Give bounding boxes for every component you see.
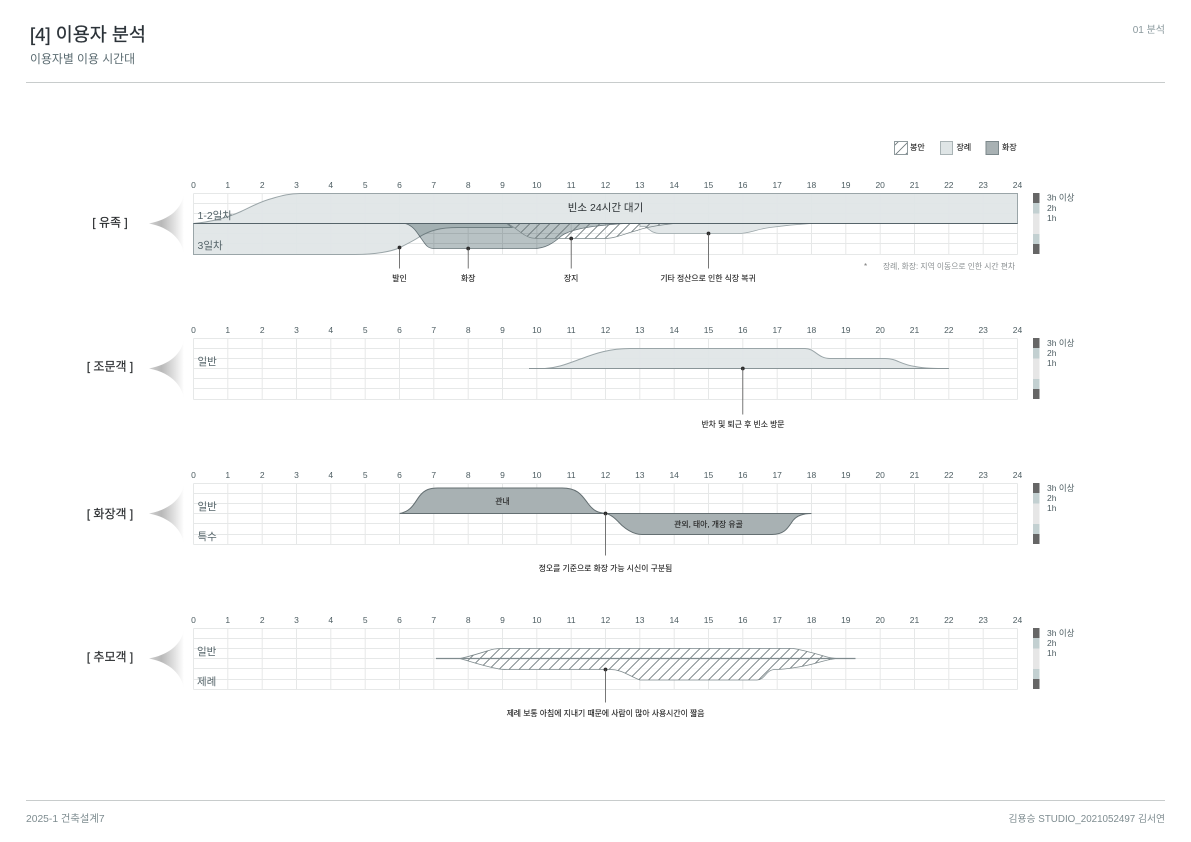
hour axis: 2 <box>260 180 265 190</box>
hour axis: 19 <box>841 180 851 190</box>
hour axis: 12 <box>601 325 610 335</box>
hour axis: 1 <box>225 470 230 480</box>
hour axis: 24 <box>1013 615 1022 625</box>
hour axis: 24 <box>1013 180 1022 190</box>
hour axis: 2 <box>260 470 265 480</box>
row label: 3일차: 3일차 <box>198 239 223 252</box>
hour axis: 13 <box>635 180 645 190</box>
hour axis: 9 <box>500 180 505 190</box>
hour axis: 7 <box>431 180 436 190</box>
hour axis: 11 <box>567 180 576 190</box>
hour axis: 6 <box>397 325 402 335</box>
callout: 장지: 장지 <box>564 273 578 283</box>
title: [4] 이용자 분석 <box>30 24 146 45</box>
heading: 유족: [ 유족 ] <box>92 216 128 230</box>
hour axis: 8 <box>466 325 471 335</box>
heading: 추모객: [ 추모객 ] <box>87 650 133 664</box>
hour axis: 23 <box>978 325 988 335</box>
hour axis: 20 <box>875 180 885 190</box>
hour axis: 11 <box>567 470 576 480</box>
hour axis: 19 <box>841 470 851 480</box>
scale bar: 2h <box>1047 493 1057 503</box>
hour axis: 12 <box>601 180 610 190</box>
hour axis: 15 <box>704 180 713 190</box>
hour axis: 15 <box>704 615 713 625</box>
hour axis: 16 <box>738 615 748 625</box>
row label: 1-2일차: 1-2일차 <box>198 209 232 222</box>
hour axis: 4 <box>328 615 333 625</box>
hour axis: 16 <box>738 325 748 335</box>
area: 화장 <box>405 224 625 248</box>
scale bar: 3h 이상 <box>1047 192 1075 202</box>
hour axis: 18 <box>807 615 816 625</box>
panel: 추모객 <box>87 615 1075 718</box>
hour axis: 6 <box>397 470 402 480</box>
callout: 장지 <box>564 237 578 283</box>
row label: 제례: 제례 <box>197 676 216 688</box>
panel: 유족 <box>92 180 1075 283</box>
section label: 01 분석 <box>1133 24 1165 36</box>
hour axis: 20 <box>875 325 885 335</box>
panel: 조문객 <box>87 325 1075 429</box>
hour axis: 6 <box>397 180 402 190</box>
hour axis: 19 <box>841 615 851 625</box>
hour axis: 2 <box>260 615 265 625</box>
hour axis: 20 <box>875 615 885 625</box>
hour axis <box>191 180 1022 190</box>
callout: 기타 정산 <box>660 232 756 283</box>
hour axis: 22 <box>944 325 954 335</box>
hour axis: 0 <box>191 470 196 480</box>
hour axis: 10 <box>532 615 542 625</box>
area: 3일차 장례 <box>194 224 512 254</box>
hour axis: 19 <box>841 325 851 335</box>
label: 관외 태아 개장 유골: 관외, 태아, 개장 유골 <box>674 519 743 529</box>
hour axis: 3 <box>294 615 299 625</box>
hour axis: 22 <box>944 470 954 480</box>
hour axis: 7 <box>431 615 436 625</box>
hour axis: 24 <box>1013 470 1022 480</box>
hour axis: 4 <box>328 180 333 190</box>
scale bar: 3h 이상 <box>1047 628 1075 638</box>
hour axis: 10 <box>532 180 542 190</box>
hour axis: 13 <box>635 615 645 625</box>
hatch fill <box>460 648 838 680</box>
legend: 봉안: 봉안 <box>910 142 925 152</box>
hour axis: 5 <box>363 615 368 625</box>
scale bar: 3h 이상 <box>1047 483 1075 493</box>
hour axis: 17 <box>772 180 782 190</box>
scale bar: 2h <box>1047 348 1057 358</box>
hour axis: 17 <box>772 615 782 625</box>
hour axis: 4 <box>328 470 333 480</box>
scale bar: 1h <box>1047 503 1057 513</box>
hour axis <box>191 615 1022 625</box>
hour axis: 1 <box>225 615 230 625</box>
hour axis: 22 <box>944 615 954 625</box>
hour axis: 17 <box>772 325 782 335</box>
hour axis: 10 <box>532 470 542 480</box>
hour axis: 20 <box>875 470 885 480</box>
hour axis: 7 <box>431 325 436 335</box>
hour axis: 23 <box>978 470 988 480</box>
area: 봉안 일반 <box>436 648 838 658</box>
hour axis: 0 <box>191 615 196 625</box>
hour axis: 14 <box>669 470 679 480</box>
hour axis: 8 <box>466 615 471 625</box>
area: 봉안 <box>507 224 674 239</box>
label: 관내: 관내 <box>495 496 510 506</box>
hour axis: 21 <box>910 325 919 335</box>
callout: 발인 <box>392 246 407 283</box>
scale bar: 1h <box>1047 648 1057 658</box>
area: 봉안 제례 <box>460 658 838 680</box>
hour axis: 24 <box>1013 325 1022 335</box>
footnote: * <box>864 262 867 271</box>
scale bar <box>1033 483 1075 544</box>
label: 빈소 24시간 대기: 빈소 24시간 대기 <box>568 202 643 214</box>
hour axis: 14 <box>669 615 679 625</box>
hour axis: 5 <box>363 325 368 335</box>
row label: 일반: 일반 <box>198 500 217 513</box>
callout: 제례: 제례 보통 아침에 지내기 때문에 사람이 많아 사용시간이 짧음 <box>507 708 704 718</box>
legend: 화장: 화장 <box>1002 142 1017 152</box>
scale bar: 2h <box>1047 203 1057 213</box>
callout: 화장 <box>461 247 475 283</box>
hour axis: 11 <box>567 325 576 335</box>
row label: 일반: 일반 <box>198 355 217 368</box>
hour axis: 12 <box>601 615 610 625</box>
footer left: 2025-1 건축설계7 <box>26 813 105 825</box>
hour axis: 10 <box>532 325 542 335</box>
brace <box>149 628 184 690</box>
heading: 화장객: [ 화장객 ] <box>87 507 133 521</box>
hour axis: 1 <box>225 180 230 190</box>
hour axis: 3 <box>294 180 299 190</box>
hour axis: 0 <box>191 180 196 190</box>
panel: 화장객 <box>87 470 1075 573</box>
hour axis: 23 <box>978 180 988 190</box>
footnote text: 장례, 화장: 지역 이동으로 인한 시간 편차 <box>883 261 1015 271</box>
hour axis: 16 <box>738 470 748 480</box>
hour axis: 1 <box>225 325 230 335</box>
callout: 제례 <box>507 668 704 718</box>
hour axis: 11 <box>567 615 576 625</box>
brace <box>149 338 184 400</box>
hour axis: 7 <box>431 470 436 480</box>
callout: 반차 및 퇴근: 반차 및 퇴근 후 빈소 방문 <box>701 419 785 429</box>
hour axis: 13 <box>635 470 645 480</box>
hour axis: 9 <box>500 470 505 480</box>
scale bar <box>1033 338 1075 399</box>
legend <box>894 142 1017 154</box>
area: 1-2일차 장례 <box>194 194 1018 224</box>
hour axis: 6 <box>397 615 402 625</box>
area: 장례 복귀 <box>640 224 811 234</box>
subtitle: 이용자별 이용 시간대 <box>30 52 135 66</box>
hour axis: 16 <box>738 180 748 190</box>
hour axis <box>191 470 1022 480</box>
hour axis: 18 <box>807 180 816 190</box>
hour axis: 15 <box>704 470 713 480</box>
hour axis: 21 <box>910 180 919 190</box>
hour axis: 8 <box>466 180 471 190</box>
hour axis: 0 <box>191 325 196 335</box>
callout: 화장: 화장 <box>461 273 475 283</box>
scale bar: 2h <box>1047 638 1057 648</box>
hour axis: 13 <box>635 325 645 335</box>
hour axis: 14 <box>669 325 679 335</box>
footer right: 김용승 STUDIO_2021052497 김서연 <box>1009 813 1165 825</box>
hour axis: 5 <box>363 180 368 190</box>
hour axis: 15 <box>704 325 713 335</box>
heading: 조문객: [ 조문객 ] <box>87 360 133 374</box>
hour axis: 12 <box>601 470 610 480</box>
hour axis: 17 <box>772 470 782 480</box>
scale bar <box>1033 192 1075 254</box>
callout: 반차 및 퇴근 <box>701 367 785 429</box>
row label: 일반: 일반 <box>197 645 217 658</box>
hour axis: 14 <box>669 180 679 190</box>
scale bar: 1h <box>1047 213 1057 223</box>
brace <box>149 193 184 254</box>
hour axis: 18 <box>807 325 816 335</box>
hour axis: 3 <box>294 325 299 335</box>
hour axis: 21 <box>910 615 919 625</box>
hour axis: 2 <box>260 325 265 335</box>
hour axis: 9 <box>500 325 505 335</box>
area: 화장 일반 <box>400 488 606 514</box>
hour axis: 22 <box>944 180 954 190</box>
legend: 장례: 장례 <box>956 142 971 152</box>
callout: 발인: 발인 <box>392 273 407 283</box>
area: 화장 특수 <box>606 514 812 534</box>
hour axis: 23 <box>978 615 988 625</box>
scale bar: 1h <box>1047 358 1057 368</box>
callout: 정오 기준 <box>539 512 672 573</box>
hour axis <box>191 325 1022 335</box>
scale bar <box>1033 628 1075 689</box>
hour axis: 21 <box>910 470 919 480</box>
callout: 정오 기준: 정오를 기준으로 화장 가능 시신이 구분됨 <box>539 563 672 573</box>
hour axis: 4 <box>328 325 333 335</box>
scale bar: 3h 이상 <box>1047 338 1075 348</box>
area: 장례 일반 <box>529 348 949 368</box>
hour axis: 3 <box>294 470 299 480</box>
row label: 특수: 특수 <box>198 531 217 543</box>
hour axis: 9 <box>500 615 505 625</box>
callout: 기타 정산: 기타 정산으로 인한 식장 복귀 <box>660 273 756 283</box>
hour axis: 5 <box>363 470 368 480</box>
brace <box>149 484 184 544</box>
hour axis: 18 <box>807 470 816 480</box>
hour axis: 8 <box>466 470 471 480</box>
